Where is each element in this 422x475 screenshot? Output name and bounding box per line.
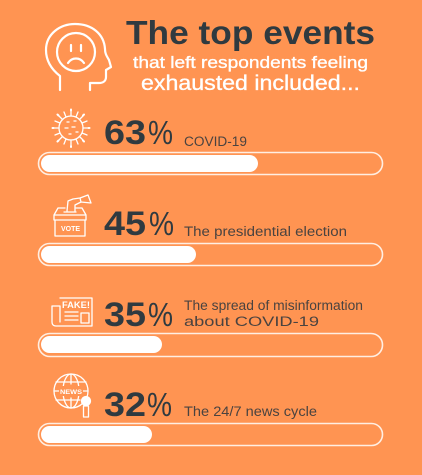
icon: fake newspaper: FAKE!	[62, 300, 90, 310]
row: news cycle	[38, 374, 382, 446]
subtitle line 1: that left respondents feeling	[133, 53, 368, 72]
icon: globe with microphone: NEWS	[60, 389, 83, 396]
row: COVID-19	[38, 110, 382, 174]
label	[184, 298, 363, 329]
progress bar 63%	[38, 152, 382, 174]
label: COVID-19	[184, 134, 247, 149]
percent value	[104, 386, 172, 424]
label: The spread of misinformation	[184, 298, 363, 313]
label: about COVID-19	[184, 314, 319, 329]
progress bar 32%	[38, 424, 382, 446]
icon: ballot box	[54, 195, 91, 236]
percent value	[104, 296, 173, 334]
label: The 24/7 news cycle	[184, 404, 317, 419]
label: The presidential election	[184, 224, 347, 239]
icon: globe with microphone	[54, 374, 90, 417]
progress bar 45%	[38, 244, 382, 266]
percent value	[104, 205, 174, 243]
row: presidential election	[38, 195, 382, 266]
icon: virus	[52, 110, 90, 147]
percent value: %	[149, 205, 174, 242]
percent value	[104, 114, 173, 152]
icon: sad head	[46, 24, 111, 90]
percent value: %	[148, 296, 173, 333]
icon: fake newspaper	[52, 298, 92, 326]
subtitle line 2: exhausted included...	[141, 72, 360, 95]
percent value: 35	[104, 296, 146, 334]
percent value: 63	[104, 114, 146, 152]
percent value: %	[148, 114, 173, 151]
percent value: %	[147, 386, 172, 423]
percent value: 45	[104, 205, 146, 243]
progress bar 35%	[38, 334, 382, 356]
icon: ballot box: VOTE	[61, 226, 80, 233]
title: The top events	[126, 14, 375, 51]
percent value: 32	[104, 386, 146, 424]
row: misinformation	[38, 296, 382, 356]
